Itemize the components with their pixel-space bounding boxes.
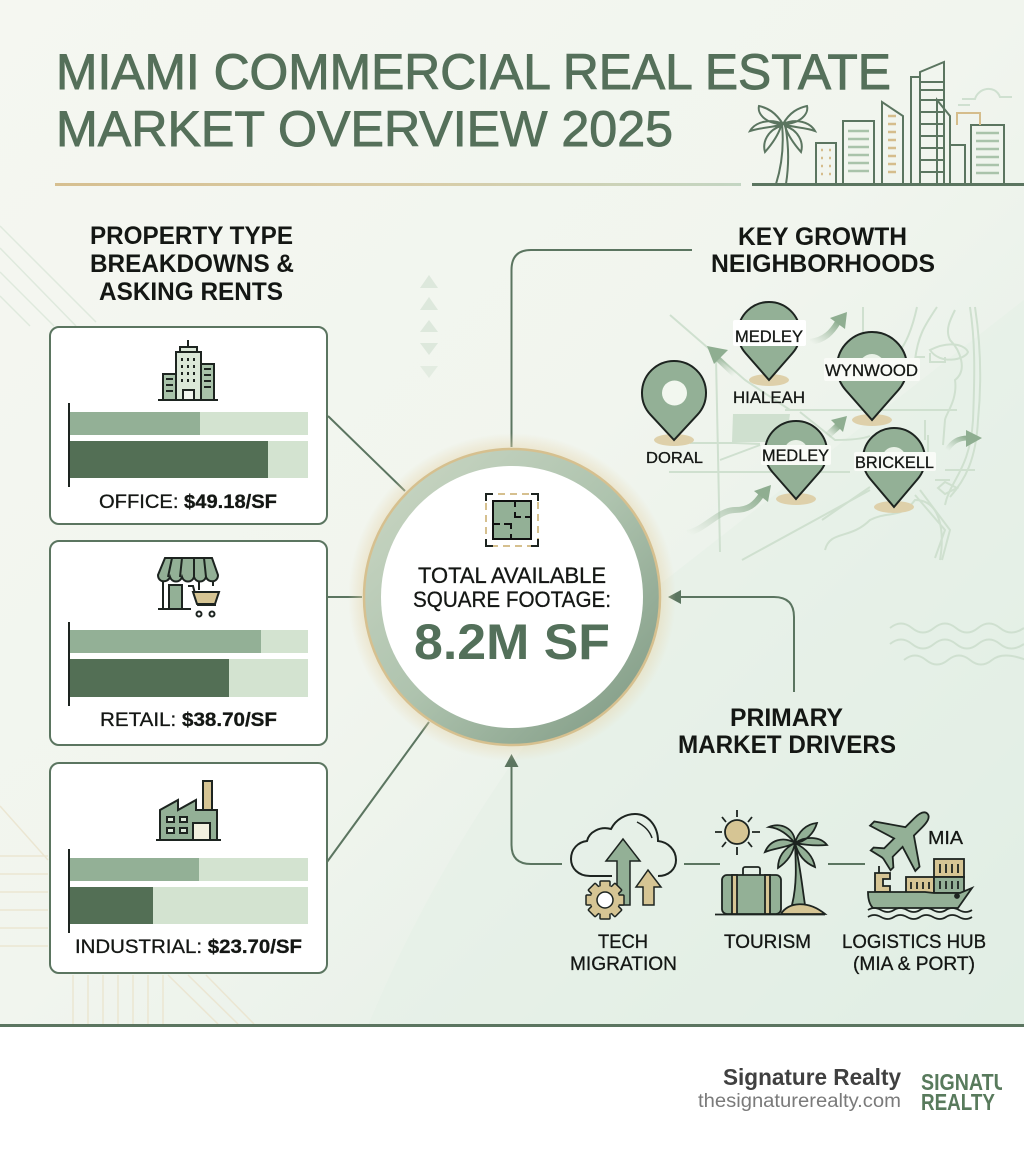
heading: property types	[90, 222, 294, 306]
label: office rent: OFFICE: $49.18/SF	[99, 491, 277, 513]
stat label	[413, 563, 611, 612]
icon: Miami skyline	[750, 62, 1024, 184]
heading: key growth neighborhoods: KEY GROWTH	[738, 223, 907, 251]
footer brand text	[698, 1064, 901, 1112]
label: logistics hub: LOGISTICS HUB	[842, 932, 986, 953]
pin: Brickell	[854, 428, 936, 513]
title rule	[55, 183, 741, 186]
footer logo	[922, 1074, 1002, 1110]
pin: Medley south	[761, 421, 831, 505]
label: logistics hub: (MIA & PORT)	[853, 954, 975, 975]
label: retail rent: RETAIL: $38.70/SF	[100, 709, 277, 731]
driver: tech migration	[570, 814, 677, 975]
heading: key growth neighborhoods	[711, 223, 935, 278]
panel: retail	[50, 541, 327, 745]
footer brand text: thesignaturerealty.com	[698, 1091, 901, 1112]
stat label: TOTAL AVAILABLE	[418, 563, 606, 588]
stat value: 8.2M SF	[414, 614, 610, 670]
panel: industrial	[50, 763, 327, 973]
icon: cloud, arrows and gear	[571, 814, 676, 919]
pin: Doral: DORAL	[646, 450, 703, 467]
pin: Medley south: MEDLEY	[762, 446, 829, 465]
pin: Medley north: MEDLEY	[735, 327, 803, 346]
footer band	[0, 1024, 1024, 1154]
pin: Wynwood: WYNWOOD	[825, 361, 918, 380]
title: MIAMI COMMERCIAL REAL ESTATE	[56, 44, 891, 100]
pin: Wynwood	[824, 332, 920, 426]
icon: store and cart	[158, 558, 219, 616]
label: tech migration	[570, 932, 677, 975]
heading: primary market drivers: PRIMARY	[730, 704, 843, 732]
label: tourism: TOURISM	[724, 932, 811, 953]
arrowheads	[504, 590, 681, 767]
label: logistics hub	[842, 932, 986, 975]
footer brand text: Signature Realty	[723, 1064, 901, 1090]
chart: retail bars	[68, 622, 308, 706]
stat label: SQUARE FOOTAGE:	[413, 587, 611, 612]
pin: Brickell: BRICKELL	[855, 453, 934, 472]
chart: office bars	[68, 403, 308, 487]
driver: tourism	[715, 810, 827, 953]
central stat circle	[348, 433, 676, 761]
heading: property types: ASKING RENTS	[99, 278, 283, 306]
title	[56, 44, 891, 157]
icon: office building	[158, 340, 218, 400]
map of neighborhoods	[642, 302, 982, 560]
pin: Medley north	[733, 302, 806, 407]
pin: Medley north: HIALEAH	[733, 388, 805, 407]
heading: primary market drivers: MARKET DRIVERS	[678, 731, 896, 759]
driver: logistics hub	[842, 791, 986, 975]
heading: primary market drivers	[678, 704, 896, 759]
icon: plane and cargo ship	[858, 791, 972, 919]
icon: factory	[156, 781, 221, 840]
connector lines	[327, 250, 865, 864]
heading: property types: PROPERTY TYPE	[90, 222, 293, 250]
icon: sun, suitcase and palm	[715, 810, 827, 914]
chart: industrial bars	[68, 849, 308, 933]
label: tech migration: TECH	[598, 932, 648, 953]
pin: Doral	[642, 361, 706, 467]
map base roads and coast	[669, 307, 980, 560]
heading: property types: BREAKDOWNS &	[90, 250, 294, 278]
label: industrial rent: INDUSTRIAL: $23.70/SF	[75, 936, 302, 958]
footer logo: REALTY	[921, 1089, 995, 1115]
label: tech migration: MIGRATION	[570, 954, 677, 975]
growth arrows	[687, 312, 982, 533]
panel: office	[50, 327, 327, 524]
icon: floor plan	[486, 494, 538, 546]
heading: key growth neighborhoods: NEIGHBORHOODS	[711, 250, 935, 278]
label: MIA: MIA	[928, 828, 963, 848]
title: MARKET OVERVIEW 2025	[56, 101, 673, 157]
